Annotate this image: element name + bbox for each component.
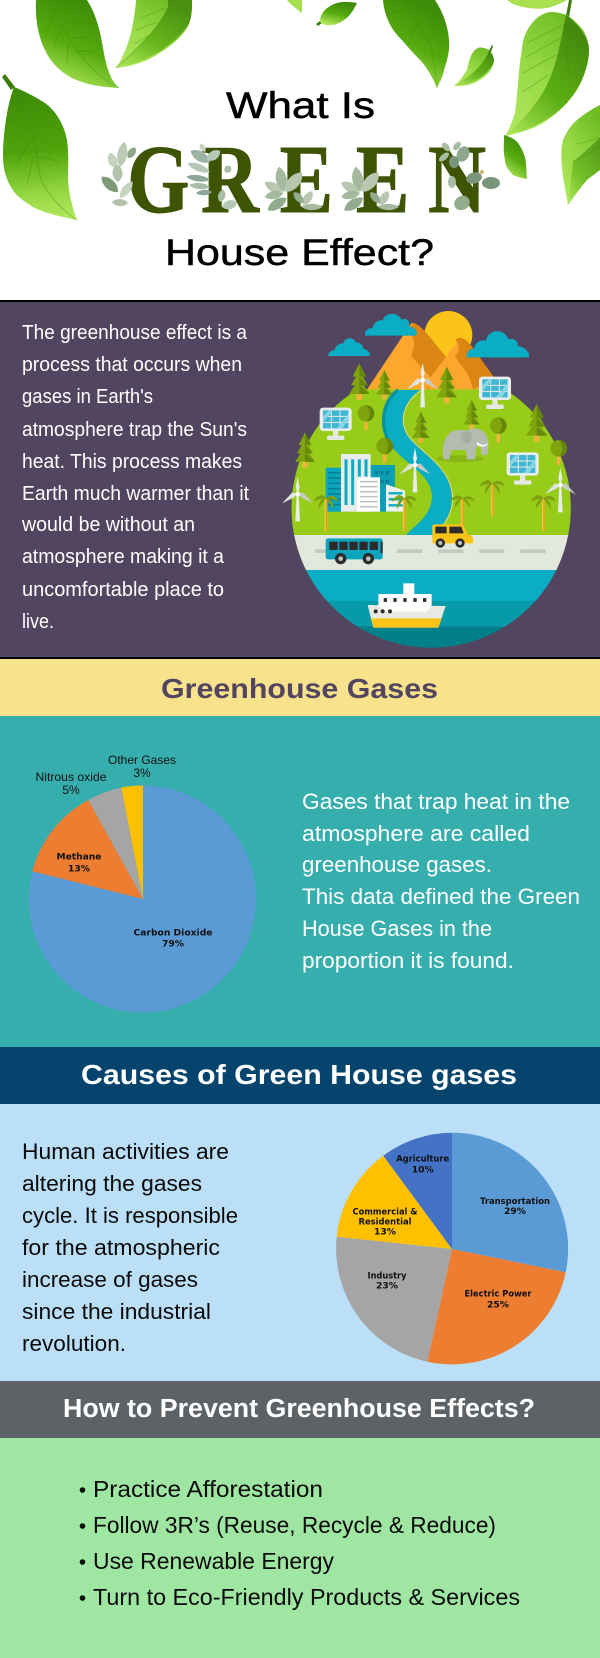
icons: round trees <box>358 405 567 465</box>
icon: sun <box>424 311 472 359</box>
text block: gases description: atmosphere are called <box>302 821 530 846</box>
pie chart: gases share: Methane <box>56 852 102 862</box>
panel: greenhouse gases heading <box>0 659 600 716</box>
icons: wind turbines <box>282 363 576 521</box>
text block: intro: live. <box>22 611 54 633</box>
pie chart: causes share: Residential <box>358 1216 412 1228</box>
icons: pine trees <box>295 363 547 468</box>
text block: intro: Earth much warmer than it <box>22 483 249 505</box>
text block: causes description: revolution. <box>22 1331 126 1356</box>
text block: intro: The greenhouse effect is a <box>22 322 248 344</box>
icon: leaf top left two <box>116 0 192 68</box>
pie chart: causes share: 29% <box>504 1206 526 1217</box>
icon: mountains <box>367 323 494 390</box>
title: house effect: House Effect? <box>165 232 434 273</box>
icon: leaf top right edge <box>507 0 567 9</box>
pie chart: causes share: Industry <box>368 1270 406 1282</box>
pie chart: causes share: 10% <box>412 1164 434 1176</box>
icon: bus <box>326 538 383 564</box>
globe body <box>290 389 573 650</box>
list item: renewable energy: Use Renewable Energy <box>93 1548 334 1574</box>
text block: causes description: Human activities are <box>22 1139 229 1164</box>
pie chart: causes share: 25% <box>487 1300 509 1310</box>
panel: header <box>0 0 600 300</box>
icon: leaf top sliver <box>287 0 302 13</box>
panel: causes heading: Causes of Green House gases <box>81 1059 517 1090</box>
pie chart: causes share: Transportation <box>480 1196 550 1207</box>
pie chart: gases share <box>29 753 256 1012</box>
pie chart: gases share: Nitrous oxide <box>36 770 107 784</box>
panel: prevent heading <box>0 1381 600 1438</box>
icon: small leaf under right <box>504 135 527 179</box>
icon: ship <box>368 583 446 628</box>
icon: leaf top right <box>383 0 449 88</box>
text block: intro <box>21 322 249 633</box>
icon: big leaf right <box>505 0 589 136</box>
text block: gases description: Gases that trap heat in the <box>302 789 570 814</box>
text block: intro: gases in Earth's <box>22 386 153 408</box>
pie chart: causes share: 13% <box>374 1226 396 1238</box>
text block: intro: atmosphere trap the Sun's <box>22 419 247 441</box>
text block: intro: process that occurs when <box>22 354 242 376</box>
icon: small leaf top centre <box>316 2 357 26</box>
panel: what is the greenhouse effect <box>0 300 600 659</box>
pie chart: gases share: 3% <box>133 766 151 780</box>
pie chart: gases share: Other Gases <box>108 753 176 767</box>
icons: solar panels <box>320 377 539 485</box>
pie chart: gases share: 79% <box>162 938 184 950</box>
title: what is: What Is <box>226 85 375 126</box>
list item: 3Rs: Follow 3R’s (Reuse, Recycle & Reduce) <box>93 1512 496 1538</box>
text block: causes description: cycle. It is responsible <box>22 1203 238 1228</box>
text block: gases description: This data defined the Green <box>302 884 580 909</box>
pie chart: gases share: Carbon Dioxide <box>134 928 212 938</box>
pie chart: causes share: Agriculture <box>396 1154 449 1164</box>
text block: intro: would be without an <box>21 514 195 536</box>
panel: greenhouse gases heading: Greenhouse Gases <box>161 673 438 704</box>
icon: leaf right edge <box>561 105 600 205</box>
icon: leaf left <box>2 74 77 220</box>
pie chart: causes share: Commercial & <box>352 1206 418 1218</box>
icon: leaf top left <box>36 0 119 88</box>
text block: causes description: increase of gases <box>22 1267 198 1292</box>
pie chart: causes share <box>336 1133 568 1364</box>
text block: causes description: for the atmospheric <box>22 1235 220 1260</box>
pie chart: causes share: Electric Power <box>464 1288 532 1300</box>
text block: intro: heat. This process makes <box>22 451 242 473</box>
pie chart: gases share: 5% <box>62 783 80 797</box>
panel: prevent heading: How to Prevent Greenhouse Effects? <box>63 1395 535 1423</box>
text block: intro: atmosphere making it a <box>22 546 225 568</box>
title: green: GREEN <box>127 126 486 234</box>
icon: elephant <box>437 428 489 462</box>
text block: causes description <box>22 1139 238 1356</box>
text block: intro: uncomfortable place to <box>22 579 224 601</box>
text block: causes description: since the industrial <box>22 1299 211 1324</box>
list item: afforestation: Practice Afforestation <box>93 1476 323 1502</box>
foliage on letters <box>98 140 500 214</box>
pie chart: causes share: 23% <box>376 1280 398 1292</box>
icon: small leaf right <box>454 45 494 86</box>
pie chart: gases share: 13% <box>68 864 90 874</box>
icon: car <box>432 524 473 548</box>
icons: palm trees <box>313 480 556 531</box>
text block: gases description: House Gases in the <box>302 916 492 941</box>
text block: gases description: proportion it is found. <box>302 948 514 973</box>
panel: greenhouse gases <box>0 716 600 1047</box>
icon: clouds <box>328 314 529 357</box>
illustration: eco globe <box>282 311 576 650</box>
panel: prevention list <box>0 1438 600 1658</box>
text block: gases description <box>302 789 580 973</box>
road dashes <box>315 546 546 557</box>
text block: causes description: altering the gases <box>22 1171 202 1196</box>
text block: gases description: greenhouse gases. <box>302 852 492 877</box>
icon: river <box>384 390 453 535</box>
panel: causes <box>0 1104 600 1381</box>
list item: eco-friendly: Turn to Eco-Friendly Products & Services <box>93 1584 520 1610</box>
icons: buildings <box>326 454 405 512</box>
panel: causes heading <box>0 1047 600 1104</box>
